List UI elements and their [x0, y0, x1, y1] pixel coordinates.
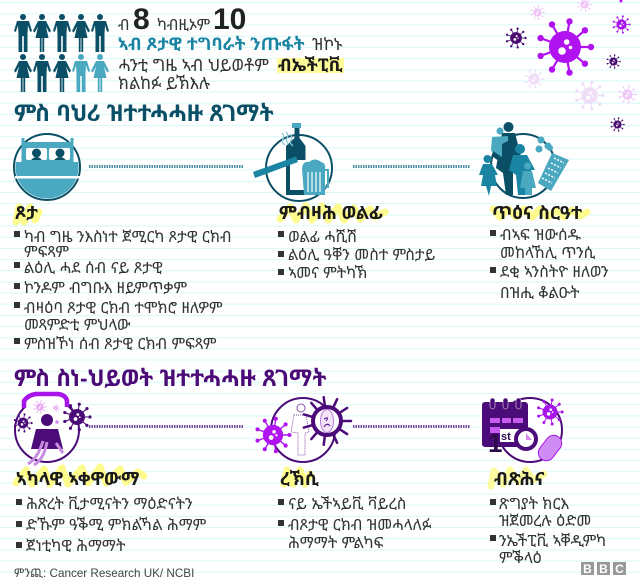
heading: biological problems: ምስ ስነ-ህይወት ዝተተሓሓዙ ጸገማት [14, 365, 326, 391]
list: puberty and reproductive history: ምቕላዕ [499, 550, 542, 567]
list: substance use: ልዕሊ ዓቐን መስተ ምስታይ [288, 247, 436, 264]
intro text: ኣብ ጾታዊ ተግባራት ንጡፋት [118, 34, 305, 54]
list: reproductive health: መከላኸሊ ጥንሲ [500, 245, 596, 262]
list: reproductive health [490, 227, 609, 302]
list: sex: ምፍጻም [24, 244, 69, 261]
label: reproductive health: ጥዕና ስርዓተ [492, 203, 582, 223]
icon: calendar, clock and pad: 1 [488, 428, 502, 458]
icon: body, DNA and virus [14, 394, 92, 465]
list: sex: ካብ ግዜ ንእስነተ ጀሚርካ ጾታዊ ርክብ [24, 229, 232, 246]
icon: infection [256, 397, 351, 462]
label: infection: ረኽሲ [280, 469, 319, 489]
intro text [118, 3, 344, 93]
list: infection [278, 496, 432, 552]
logo: BBC: C [615, 562, 624, 576]
logo: BBC: B [599, 562, 608, 576]
list: infection: ብጾታዊ ርክብ ዝመሓላለፉ [288, 517, 432, 534]
intro text: ዝኮኑ [312, 35, 342, 54]
list: puberty and reproductive history: ንኤችፒቪ ኣቐዲምካ [499, 533, 606, 550]
list: sex: ኮንዶም ብግቡእ ዘይምጥቃም [24, 280, 187, 297]
icon: family and contraceptive pills [479, 122, 569, 198]
list: substance use: ኣመና ምትካኽ [288, 265, 367, 282]
icon: cigarette, bottle and beer [253, 123, 332, 201]
heading: behaviour problems: ምስ ባህሪ ዝተተሓሓዙ ጸገማት [14, 100, 274, 126]
icon: bed [13, 133, 81, 201]
label: sex: ጾታ [15, 203, 38, 223]
intro text: ብ [118, 17, 130, 34]
list: sex: ልዕሊ ሓደ ሰብ ናይ ጾታዊ [24, 260, 163, 277]
list: puberty and reproductive history [490, 496, 606, 567]
list: substance use: ወልፊ ሓሺሽ [288, 229, 357, 246]
list: reproductive health: ደቂ ኣንስትዮ ዘለወን [500, 264, 609, 281]
connector: substances to reproductive health [353, 165, 470, 168]
intro text: 8 [133, 3, 150, 36]
list: infection: ሕማማት ምልካፍ [288, 535, 384, 552]
logo: BBC [581, 562, 626, 576]
list: reproductive health: ብኣፍ ዝውሰዱ [500, 227, 582, 244]
intro text: ካብዚኦም [157, 17, 211, 34]
list: sex: ብዛዕባ ጾታዊ ርክብ ተሞክሮ ዘለዎም [24, 300, 223, 317]
list: puberty and reproductive history: ዝጀመረሉ ዕድመ [499, 513, 591, 530]
list: physical makeup: ጀነቲካዊ ሕማማት [26, 538, 126, 555]
list: physical makeup [16, 496, 207, 555]
list: sex: ምስዝኾነ ሰብ ጾታዊ ርክብ ምፍጻም [24, 336, 217, 353]
list: sex [14, 229, 232, 353]
intro text: ብኤችፒቪ [278, 55, 343, 75]
list: infection: ናይ ኤችኣይቪ ቫይረስ [288, 496, 406, 513]
intro text: ሓንቲ ግዜ ኣብ ህይወቶም [118, 56, 269, 75]
list: physical makeup: ድኹም ዓቕሚ ምክልኻል ሕማም [26, 517, 207, 534]
label: physical makeup: ኣካላዊ ኣቀዋውማ [16, 469, 139, 489]
connector: body to infection [89, 425, 243, 428]
connector: infection to reproductive history [353, 425, 470, 428]
source: ምንጪ: Cancer Research UK/ NCBI [14, 567, 194, 580]
list: reproductive health: በዝሒ ቆልዑት [500, 285, 580, 302]
icon: virus cluster [506, 0, 637, 132]
icon: calendar, clock and pad [482, 398, 565, 464]
list: sex: መጻምድቲ ምህላው [24, 317, 131, 334]
icon: ten people, eight dark and two light [14, 14, 109, 92]
list: puberty and reproductive history: ጽግያት ክርእ [499, 496, 569, 513]
logo: BBC: B [583, 562, 592, 576]
intro text: 10 [213, 3, 246, 36]
intro text: ክልከፉ ይኽእሉ [118, 74, 210, 93]
label: puberty and reproductive history: ብጽሕና [494, 469, 545, 489]
list: physical makeup: ሕጽረት ቪታሚናትን ማዕድናትን [26, 496, 193, 513]
label: substance use: ምብዛሕ ወልፊ [279, 203, 383, 223]
connector: bed to substances [89, 165, 243, 168]
icon: calendar, clock and pad: st [501, 431, 511, 443]
list: substance use [278, 229, 436, 282]
